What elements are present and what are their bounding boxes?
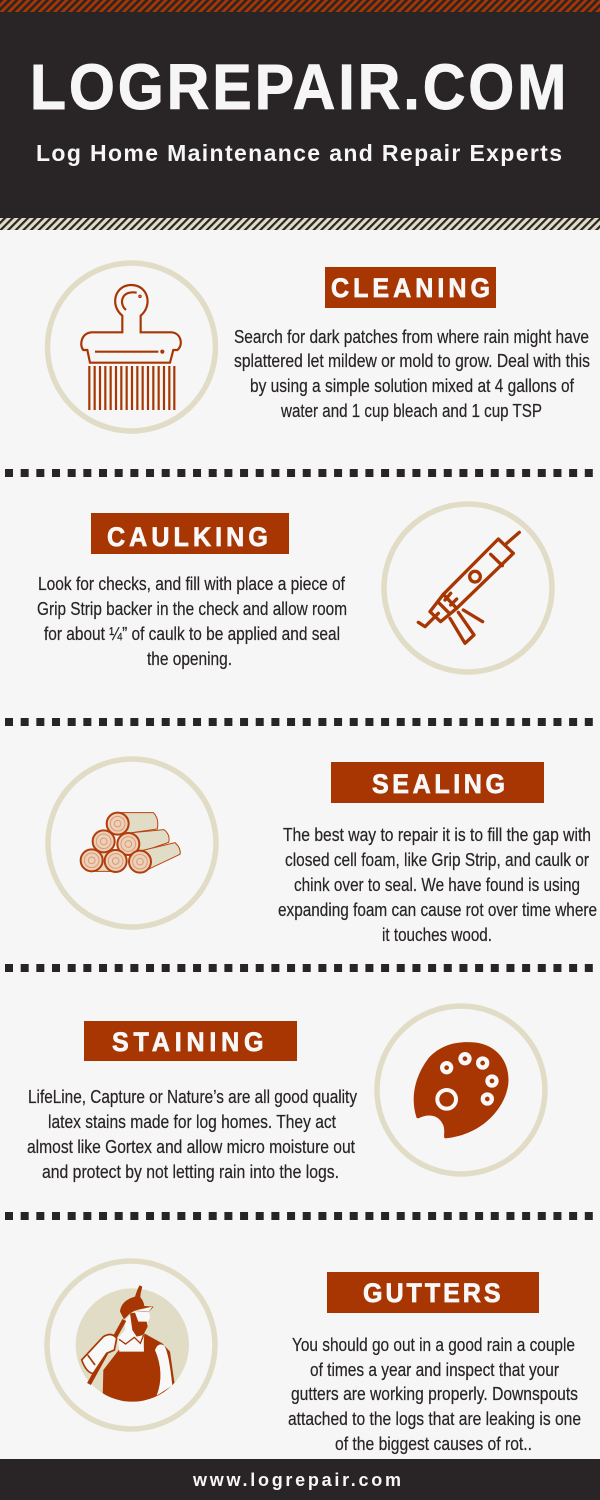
icon: caulking gun in circle bbox=[384, 504, 552, 672]
header banner bbox=[0, 0, 600, 230]
text: sealing bbox=[278, 825, 597, 945]
heading: caulking bbox=[91, 513, 289, 554]
panel: staining bbox=[27, 1006, 545, 1182]
panel: gutters bbox=[47, 1261, 581, 1454]
heading: sealing bbox=[331, 762, 544, 803]
text: cleaning: water and 1 cup bleach and 1 cup TSP bbox=[280, 401, 542, 421]
text: staining: almost like Gortex and allow micro moisture out bbox=[27, 1137, 355, 1157]
subtitle: Log Home Maintenance and Repair Experts bbox=[36, 140, 562, 166]
icon: comb brush in circle bbox=[48, 263, 216, 431]
icon: paint palette in circle bbox=[377, 1006, 545, 1174]
text: staining: latex stains made for log homes. They act bbox=[48, 1112, 336, 1132]
icon: worker in circle bbox=[47, 1261, 215, 1429]
heading: staining bbox=[84, 1021, 297, 1061]
text: caulking: for about ¼” of caulk to be applied and seal bbox=[44, 624, 340, 644]
text: caulking: Look for checks, and fill with place a piece of bbox=[38, 574, 346, 594]
heading: gutters: GUTTERS bbox=[363, 1277, 501, 1308]
heading: sealing: SEALING bbox=[372, 768, 505, 799]
text: caulking: Grip Strip backer in the check and allow room bbox=[37, 599, 347, 619]
text: caulking: the opening. bbox=[147, 649, 232, 669]
text: gutters: of times a year and inspect that your bbox=[310, 1360, 559, 1380]
heading: caulking: CAULKING bbox=[107, 521, 268, 552]
text: staining: and protect by not letting rain into the logs. bbox=[42, 1162, 339, 1182]
footer bar: www.logrepair.com bbox=[192, 1470, 401, 1490]
text: gutters: of the biggest causes of rot.. bbox=[335, 1434, 532, 1454]
text: cleaning bbox=[234, 327, 590, 421]
text: sealing: it touches wood. bbox=[382, 925, 492, 945]
icon: stacked logs in circle bbox=[48, 759, 216, 927]
panel: caulking bbox=[37, 504, 552, 672]
heading: staining: STAINING bbox=[112, 1026, 264, 1057]
panel: cleaning bbox=[48, 263, 590, 431]
text: gutters bbox=[288, 1335, 581, 1454]
text: caulking bbox=[37, 574, 347, 669]
text: staining bbox=[27, 1087, 357, 1182]
footer bar bbox=[0, 1459, 600, 1500]
title: LOGREPAIR.COM bbox=[30, 52, 566, 124]
text: staining: LifeLine, Capture or Nature’s are all good quality bbox=[28, 1087, 357, 1107]
panel: sealing bbox=[48, 759, 597, 945]
heading: gutters bbox=[327, 1272, 539, 1313]
heading: cleaning: CLEANING bbox=[331, 272, 490, 303]
